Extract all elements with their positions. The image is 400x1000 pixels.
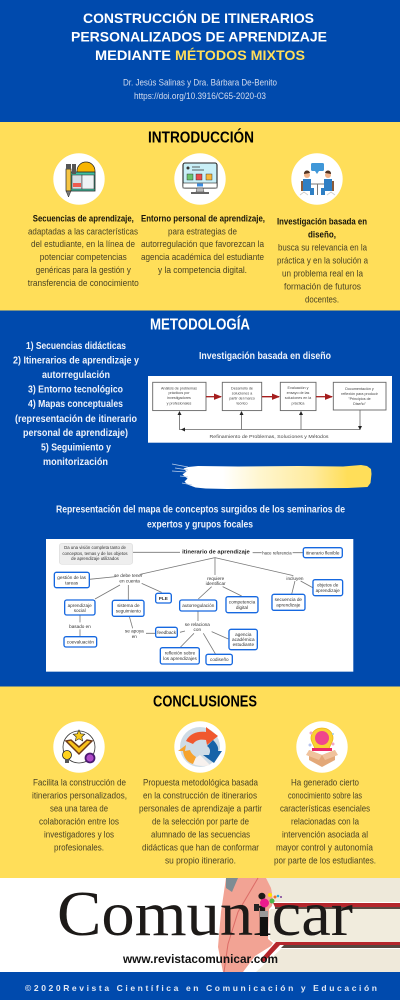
text block: conclusión 3: por parte de los estudiantes. xyxy=(274,856,376,866)
diagram: design-based research: Análisis de problemas xyxy=(161,386,197,390)
grey summary box: Da una visión completa tanto de xyxy=(64,545,127,550)
panel: footer with books and logo xyxy=(0,878,400,972)
concept nodes: estudiante xyxy=(233,642,254,647)
text block: conclusión 2: alumnado de las secuencias xyxy=(151,830,250,840)
text block: conclusión 1: sea una tarea de xyxy=(50,804,108,814)
text block: conclusión 3: Ha generado cierto xyxy=(291,778,359,788)
text block: entorno personal: autorregulación que favorezcan la xyxy=(141,239,265,250)
concept nodes: académica xyxy=(232,637,255,642)
text block: conclusión 1: profesionales. xyxy=(54,842,104,854)
diagram: design-based research: reflexión para producir xyxy=(341,392,379,396)
text block: entorno personal: para estrategias de xyxy=(168,226,237,238)
icon: computer monitor xyxy=(174,153,226,205)
text block: entorno personal: agencia académica del estudiante xyxy=(141,252,264,263)
diagram: design-based research: Diseño" xyxy=(353,402,367,406)
link labels: basado en xyxy=(69,624,91,629)
heading: metodología: METODOLOGÍA xyxy=(150,316,250,334)
list: methods xyxy=(13,341,139,468)
text block: conclusión 3: conocimiento sobre las xyxy=(288,790,362,802)
concept nodes: objetos de xyxy=(317,582,339,587)
concept nodes: social xyxy=(74,608,86,613)
text block: conclusión 2: didácticas que han de conformar xyxy=(142,842,260,854)
diagram: design-based research: ensayo de las xyxy=(287,391,310,395)
concept nodes: feedback xyxy=(157,630,177,635)
link labels xyxy=(69,550,304,639)
text block: conclusión 3: mayor control y autonomía xyxy=(276,842,374,854)
concept nodes: sistema de xyxy=(117,603,140,608)
text block: investigación basada en diseño: busca su relevancia en la xyxy=(278,242,368,254)
link labels: hace referencia xyxy=(262,550,292,555)
brush stroke divider xyxy=(172,464,372,489)
icon: cycle arrows xyxy=(174,721,226,773)
concept nodes: codiseño xyxy=(210,657,229,662)
text block: investigación basada en diseño: docentes. xyxy=(305,294,339,306)
concept nodes: los aprendizajes xyxy=(163,656,197,661)
authors and doi xyxy=(123,78,277,102)
text block: investigación basada en diseño: un problema real en la xyxy=(282,268,364,280)
books photo xyxy=(218,878,400,972)
grey summary box: de aprendizaje utilizados xyxy=(71,556,119,561)
text block: conclusión 1: investigadores y los xyxy=(44,830,114,840)
text block: conclusión 2: su propio itinerario. xyxy=(165,856,236,866)
list: methods: 5) Seguimiento y xyxy=(41,442,111,454)
link labels: con xyxy=(194,627,201,632)
concept nodes: digital xyxy=(236,605,248,610)
authors and doi: https://doi.org/10.3916/C65-2020-03 xyxy=(134,91,266,102)
diagram: design-based research: soluciones en la xyxy=(285,396,312,400)
heading: concept map: expertos y grupos focales xyxy=(147,520,253,530)
concept map xyxy=(46,539,353,672)
text block: investigación basada en diseño: Investigación basada en xyxy=(277,216,367,228)
icon: star, check, bulb and gear xyxy=(53,721,105,773)
diagram: design-based research: partir del marco xyxy=(229,396,255,400)
diagram: design-based research xyxy=(148,376,392,443)
icon: two people talking at a table xyxy=(291,153,343,205)
concept nodes: PLE xyxy=(159,596,168,601)
central node: itinerario de aprendizaje xyxy=(182,549,250,555)
list: methods: (representación de itinerario xyxy=(15,414,137,425)
text block: conclusión 1: Facilita la construcción de xyxy=(33,778,126,788)
footer bar with copyright xyxy=(0,972,400,1000)
diagram: design-based research: investigadores xyxy=(167,396,191,400)
concept nodes: secuencia de xyxy=(275,597,302,602)
text block: conclusión 2 xyxy=(139,778,263,866)
text block: conclusión 3: relacionadas con la xyxy=(291,816,360,828)
concept nodes: aprendizaje xyxy=(316,588,340,593)
concept nodes: agencia xyxy=(235,632,252,637)
text block: conclusión 2: en la construcción de itinerarios xyxy=(143,790,257,802)
concept nodes: coevaluación xyxy=(67,639,94,644)
link labels: se debe tener xyxy=(114,573,143,578)
panel: conclusiones xyxy=(0,686,400,878)
list: methods: personal de aprendizaje) xyxy=(23,428,128,439)
connector lines xyxy=(80,552,313,654)
heading: introducción: INTRODUCCIÓN xyxy=(148,128,254,146)
panel: introducción xyxy=(0,122,400,310)
text block: conclusión 1 xyxy=(32,778,127,854)
diagram: design-based research: y profesionales xyxy=(167,402,192,406)
text block: conclusión 1: colaboración entre los xyxy=(39,816,119,828)
link labels: se apoya xyxy=(125,628,144,633)
link labels: requiere xyxy=(207,576,225,581)
diagram: design-based research: prácticos por xyxy=(168,391,190,395)
link labels: en xyxy=(132,634,137,639)
diagram: design-based research: Documentación y xyxy=(345,387,374,391)
header panel xyxy=(0,0,400,122)
list: methods: monitorización xyxy=(43,457,108,468)
text block: entorno personal: y la competencia digital. xyxy=(158,265,247,276)
heading: investigación basada en diseño: Investigación basada en diseño xyxy=(199,351,331,362)
text block: investigación basada en diseño: diseño, xyxy=(308,230,336,240)
text block: secuencias de aprendizaje: Secuencias de aprendizaje, xyxy=(33,214,134,224)
heading: conclusiones: CONCLUSIONES xyxy=(153,694,257,710)
link labels: se relaciona xyxy=(185,622,210,627)
text block: conclusión 2: de la selección por parte de xyxy=(152,816,249,828)
website: www.revistacomunicar.com xyxy=(122,954,278,966)
text block: conclusión 3: intervención asociada al xyxy=(282,830,368,840)
link labels: identificar xyxy=(206,581,226,586)
diagram: design-based research: "Principios de xyxy=(348,397,371,401)
text block: entorno personal xyxy=(141,214,265,276)
concept nodes: reflexión sobre xyxy=(165,650,196,655)
text block: secuencias de aprendizaje: del estudiante, en la línea de xyxy=(31,239,135,250)
heading: concept map: Representación del mapa de conceptos surgidos de los seminarios de xyxy=(56,504,345,516)
panel: metodología xyxy=(0,310,400,686)
text block: secuencias de aprendizaje: transferencia de conocimiento xyxy=(28,278,139,289)
heading: concept map xyxy=(56,504,345,530)
concept nodes: competencia xyxy=(229,599,256,604)
text block: entorno personal: Entorno personal de aprendizaje, xyxy=(141,214,265,224)
concept nodes: aprendizaje xyxy=(276,602,301,607)
text block: investigación basada en diseño: formación de futuros xyxy=(284,282,361,292)
grey summary box: conceptos, temas y de los objetos xyxy=(62,551,128,556)
concept nodes: itinerario flexible xyxy=(306,550,340,555)
diagram: design-based research: Refinamiento de Problemas, Soluciones y Métodos xyxy=(210,434,329,439)
diagram: design-based research: teórico xyxy=(236,402,248,406)
text block: investigación basada en diseño: práctica y en la solución a xyxy=(277,256,369,266)
concept nodes: tareas xyxy=(65,580,79,585)
text block: conclusión 3 xyxy=(274,778,376,866)
concept nodes xyxy=(54,548,343,665)
text block: secuencias de aprendizaje: genéricas para la gestión y xyxy=(36,265,131,276)
title xyxy=(71,9,327,63)
text block: secuencias de aprendizaje: adaptadas a las características xyxy=(28,226,138,238)
title: PERSONALIZADOS DE APRENDIZAJE xyxy=(71,28,327,44)
list: methods: 3) Entorno tecnológico xyxy=(28,384,123,396)
list: methods: 2) Itinerarios de aprendizaje y xyxy=(13,356,139,366)
diagram: design-based research: soluciones a xyxy=(232,392,253,396)
icon: gift box with light bulb xyxy=(296,721,348,773)
authors and doi: Dr. Jesús Salinas y Dra. Bárbara De-Benito xyxy=(123,78,277,88)
grey summary box xyxy=(59,543,133,564)
text block: secuencias de aprendizaje xyxy=(28,214,139,289)
link labels: en cuenta xyxy=(119,578,140,583)
title: MEDIANTE xyxy=(95,47,171,63)
text block: conclusión 2: personales de aprendizaje a partir xyxy=(139,804,263,814)
text block: secuencias de aprendizaje: potenciar competencias xyxy=(40,252,127,263)
list: methods: 4) Mapas conceptuales xyxy=(28,399,123,410)
diagram: design-based research: práctica xyxy=(292,402,305,406)
diagram: design-based research: Evaluación y xyxy=(288,386,309,390)
footer bar with copyright: ©2020Revista Científica en Comunicación y Educación xyxy=(25,983,377,993)
diagram: design-based research: Desarrollo de xyxy=(231,386,253,390)
logo: Comunicar: Comunicar xyxy=(57,879,353,949)
title: CONSTRUCCIÓN DE ITINERARIOS xyxy=(83,9,314,26)
concept nodes: aprendizaje xyxy=(68,603,92,608)
concept nodes: autorregulación xyxy=(182,603,215,608)
list: methods: autorregulación xyxy=(42,370,110,381)
concept nodes: seguimiento xyxy=(116,608,141,613)
title: MÉTODOS MIXTOS xyxy=(175,47,305,63)
text block: conclusión 3: características esenciales xyxy=(280,804,370,814)
text block: investigación basada en diseño xyxy=(277,216,369,306)
link labels: incluyen xyxy=(286,576,304,581)
list: methods: 1) Secuencias didácticas xyxy=(26,341,126,352)
concept nodes: gestión de las xyxy=(57,575,87,580)
text block: conclusión 1: itinerarios personalizados, xyxy=(32,790,127,802)
text block: conclusión 2: Propuesta metodológica basada xyxy=(143,778,259,788)
icon: book, pencil and gear xyxy=(53,153,105,205)
